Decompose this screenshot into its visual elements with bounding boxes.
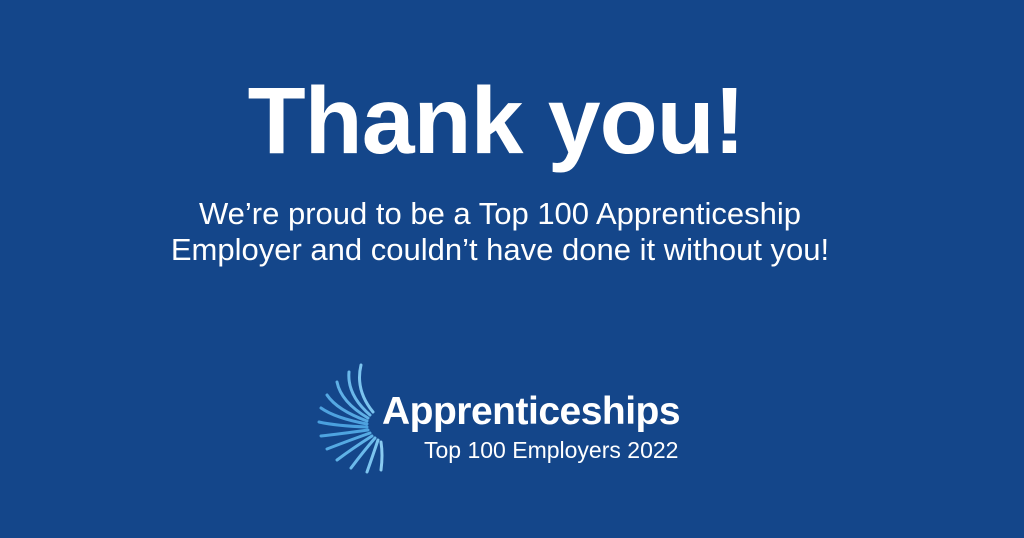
logo tagline: Top 100 Employers 2022 [424, 437, 678, 463]
subtitle text: Employer and couldn’t have done it without you! [171, 232, 829, 267]
subtitle text [171, 196, 829, 267]
subtitle text: We’re proud to be a Top 100 Apprenticeship [199, 196, 801, 231]
icon: fan [318, 364, 384, 474]
logo [318, 364, 680, 474]
logo wordmark: Apprenticeships [382, 390, 680, 433]
title: Thank you! [248, 68, 744, 174]
